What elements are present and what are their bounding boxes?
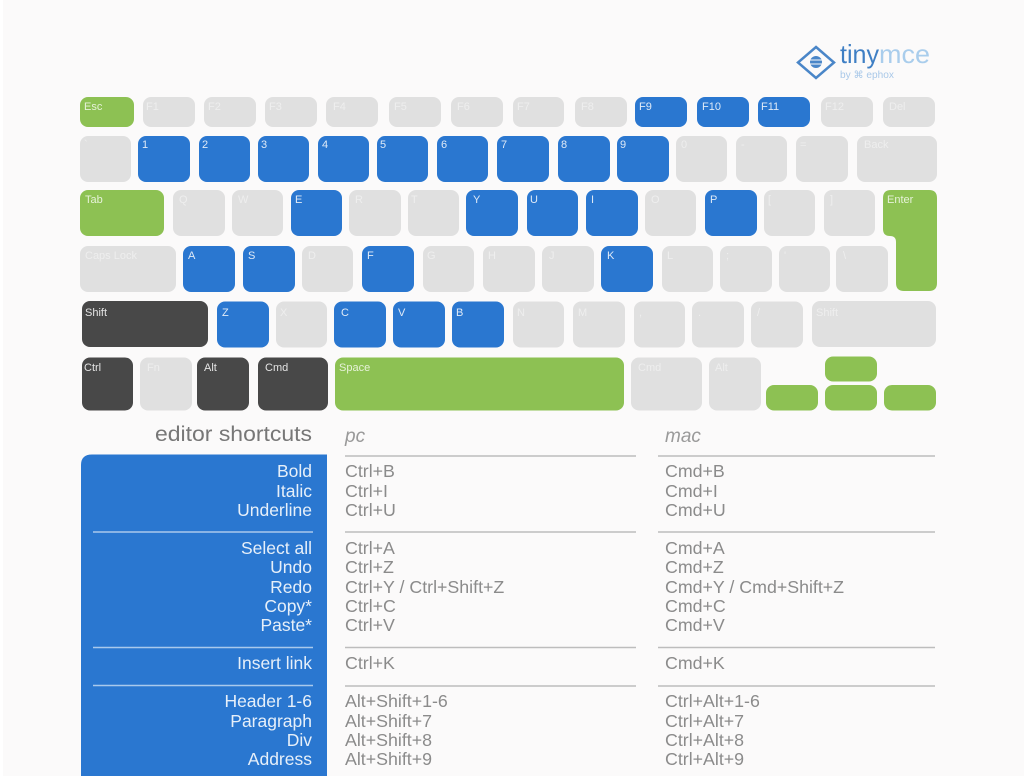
key F3 [265,97,317,127]
key G [423,246,474,292]
key apostrophe [779,246,830,292]
label group: editing: Redo [270,577,312,597]
key L: L [667,250,673,262]
key I [586,190,638,236]
key F1 [143,97,195,127]
key left Cmd [258,358,328,410]
key comma: , [639,307,642,319]
key Ctrl: Ctrl [84,362,101,374]
key backslash [836,246,888,292]
key H [483,246,535,292]
key left Alt [197,358,249,410]
key C [334,302,386,348]
key Y [466,190,518,236]
key D: D [308,250,316,262]
key 0: 0 [681,139,687,151]
key Q [173,190,225,236]
key T [408,190,459,236]
key S: S [248,250,255,262]
key O: O [651,194,660,206]
key F8 [575,97,627,127]
key F3: F3 [269,101,282,113]
key 0 [676,136,727,182]
key right Alt [709,358,761,410]
key apostrophe: ' [784,250,786,262]
label group: formatting: Underline [237,500,312,520]
pc group: blocks: Alt+Shift+8 [345,730,432,750]
key F5: F5 [394,101,407,113]
key J: J [549,250,554,262]
heading: pc: pc [344,426,366,447]
pc group: blocks [345,691,448,769]
logo: tinymce by ephox: tiny [840,39,879,69]
key left Shift [82,301,208,347]
label group: editing: Select all [241,538,312,558]
key F5 [389,97,441,127]
key 9 [617,136,669,182]
key right Cmd [631,358,702,410]
key F7: F7 [517,101,530,113]
key period [692,302,744,348]
key 1 [138,136,190,182]
key right Shift [812,301,936,347]
pc group: editing: Ctrl+Z [345,557,394,577]
pc group: editing: Ctrl+Y / Ctrl+Shift+Z [345,577,504,597]
pc group: blocks: Alt+Shift+7 [345,711,432,731]
key left Alt: Alt [204,362,217,374]
label group: formatting: Bold [277,461,312,481]
key left Shift: Shift [85,307,107,319]
pc group: formatting: Ctrl+U [345,500,396,520]
key slash: / [757,307,761,319]
key Enter [883,190,937,291]
key Esc [80,97,134,127]
key K: K [607,250,615,262]
key 2: 2 [202,139,208,151]
key Z: Z [222,307,229,319]
key Q: Q [179,194,188,206]
pc group: formatting: Ctrl+I [345,481,388,501]
heading: mac: mac [665,426,701,447]
key S [243,246,295,292]
mac group: blocks: Ctrl+Alt+1-6 [665,691,760,711]
key X: X [280,307,288,319]
key 1: 1 [142,139,148,151]
key Enter: Enter [887,194,914,206]
panel: shortcut names [81,454,327,776]
mac group: blocks [665,691,760,769]
key U: U [530,194,538,206]
key 7 [497,136,549,182]
key Space: Space [339,362,370,374]
pc group: editing [345,538,504,635]
label group: editing [241,538,312,635]
key Fn: Fn [147,362,160,374]
key F2: F2 [208,101,221,113]
key F [362,246,414,292]
key O [645,190,696,236]
mac group: blocks: Ctrl+Alt+8 [665,730,744,750]
key 3: 3 [261,139,267,151]
mac group: formatting [665,461,726,520]
key equals: = [800,139,806,151]
key G: G [427,250,436,262]
key Ctrl [82,358,133,410]
key F: F [367,250,374,262]
key 4 [318,136,369,182]
mac group: blocks: Ctrl+Alt+7 [665,711,744,731]
mac group: editing: Cmd+Y / Cmd+Shift+Z [665,577,844,597]
key Tab: Tab [85,194,103,206]
key U [527,190,578,236]
key D [302,246,353,292]
label group: formatting [237,461,312,520]
key Y: Y [473,194,481,206]
key 2 [199,136,250,182]
key 9: 9 [620,139,626,151]
key 5: 5 [380,139,386,151]
key Del: Del [889,101,906,113]
key B: B [456,307,463,319]
key Caps Lock: Caps Lock [85,250,137,262]
label group: editing: Undo [270,557,312,577]
key arrow left [766,385,818,410]
pc group: formatting [345,461,396,520]
key R: R [355,194,363,206]
key F12: F12 [825,101,844,113]
key P: P [710,194,717,206]
key 3 [258,136,309,182]
label group: blocks: Div [287,730,312,750]
key Tab [80,190,164,236]
key H: H [488,250,496,262]
key 7: 7 [501,139,507,151]
mac group: formatting: Cmd+B [665,461,725,481]
key P [705,190,757,236]
key Z [217,302,269,348]
key M [573,302,625,348]
label: insert link: Insert link [237,653,312,673]
key 8 [558,136,610,182]
label group: blocks: Address [248,749,312,769]
pc group: blocks: Alt+Shift+1-6 [345,691,448,711]
key T: T [411,194,418,206]
key F4 [326,97,378,127]
key L [662,246,713,292]
pc: insert link: Ctrl+K [345,653,395,673]
key B [452,302,504,348]
key period: . [698,307,701,319]
key W: W [238,194,249,206]
pc group: blocks: Alt+Shift+9 [345,749,432,769]
key F10: F10 [702,101,721,113]
key minus: - [741,139,745,151]
key 6 [437,136,488,182]
key K [601,246,653,292]
key V [393,302,445,348]
heading: editor shortcuts: editor shortcuts [155,423,312,446]
pc group: editing: Ctrl+C [345,596,396,616]
label group: editing: Copy* [264,596,312,616]
key slash [751,302,803,348]
logo: tinymce by ephox [798,39,930,81]
key N [513,302,564,348]
logo: tinymce by ephox: by ⌘ ephox [840,70,894,81]
mac: insert link: Cmd+K [665,653,725,673]
key I: I [591,194,594,206]
key left bracket [764,190,815,236]
key F12 [821,97,873,127]
key F9: F9 [639,101,652,113]
key comma [634,302,685,348]
key E [291,190,342,236]
key R [349,190,401,236]
key 6: 6 [441,139,447,151]
key right bracket [824,190,875,236]
key Esc: Esc [84,101,103,113]
key semicolon [720,246,772,292]
key Back: Back [864,139,889,151]
key right Shift: Shift [816,307,838,319]
mac group: blocks: Ctrl+Alt+9 [665,749,744,769]
key F4: F4 [333,101,346,113]
key F11: F11 [761,101,779,113]
mac group: formatting: Cmd+U [665,500,726,520]
key F10 [697,97,749,127]
key equals [796,136,848,182]
key backtick: ` [84,139,88,151]
mac group: editing: Cmd+Z [665,557,724,577]
keyboard [80,97,937,410]
label group: formatting: Italic [276,481,312,501]
key F1: F1 [146,101,159,113]
label group: blocks [224,691,312,769]
label group: editing: Paste* [260,615,312,635]
logo: tinymce by ephox: mce [879,39,930,69]
key right Cmd: Cmd [638,362,661,374]
column: pc shortcuts [345,456,636,769]
pc group: editing: Ctrl+V [345,615,395,635]
key Caps Lock [80,246,176,292]
key Fn [140,358,192,410]
key E: E [295,194,302,206]
mac group: editing: Cmd+A [665,538,725,558]
pc group: formatting: Ctrl+B [345,461,395,481]
mac group: editing [665,538,844,635]
key M: M [578,307,587,319]
key Back [857,136,937,182]
key F6: F6 [457,101,470,113]
key minus [736,136,787,182]
key Space [335,358,624,410]
key F7 [513,97,564,127]
key left Cmd: Cmd [265,362,288,374]
key right Alt: Alt [715,362,728,374]
key semicolon: ; [726,250,729,262]
key backslash: \ [843,250,847,262]
key F9 [635,97,687,127]
key F11 [758,97,810,127]
key arrow right [884,385,936,410]
key A [183,246,235,292]
key C: C [341,307,349,319]
key F6 [451,97,503,127]
mac group: formatting: Cmd+I [665,481,718,501]
label group: blocks: Header 1-6 [224,691,312,711]
key V: V [398,307,406,319]
key J [542,246,594,292]
key left bracket: [ [768,194,771,206]
key Del [883,97,935,127]
key F8: F8 [581,101,594,113]
column: mac shortcuts [658,456,935,769]
mac group: editing: Cmd+C [665,596,726,616]
key W [232,190,283,236]
key right bracket: ] [830,194,833,206]
key F2 [204,97,256,127]
key N: N [517,307,525,319]
mac group: editing: Cmd+V [665,615,725,635]
key 5 [377,136,428,182]
key A: A [188,250,196,262]
key 8: 8 [561,139,567,151]
label group: blocks: Paragraph [230,711,312,731]
key 4: 4 [322,139,328,151]
key backtick [80,136,131,182]
pc group: editing: Ctrl+A [345,538,395,558]
key X [276,302,327,348]
key arrow down [825,385,877,410]
key arrow up [825,356,877,382]
